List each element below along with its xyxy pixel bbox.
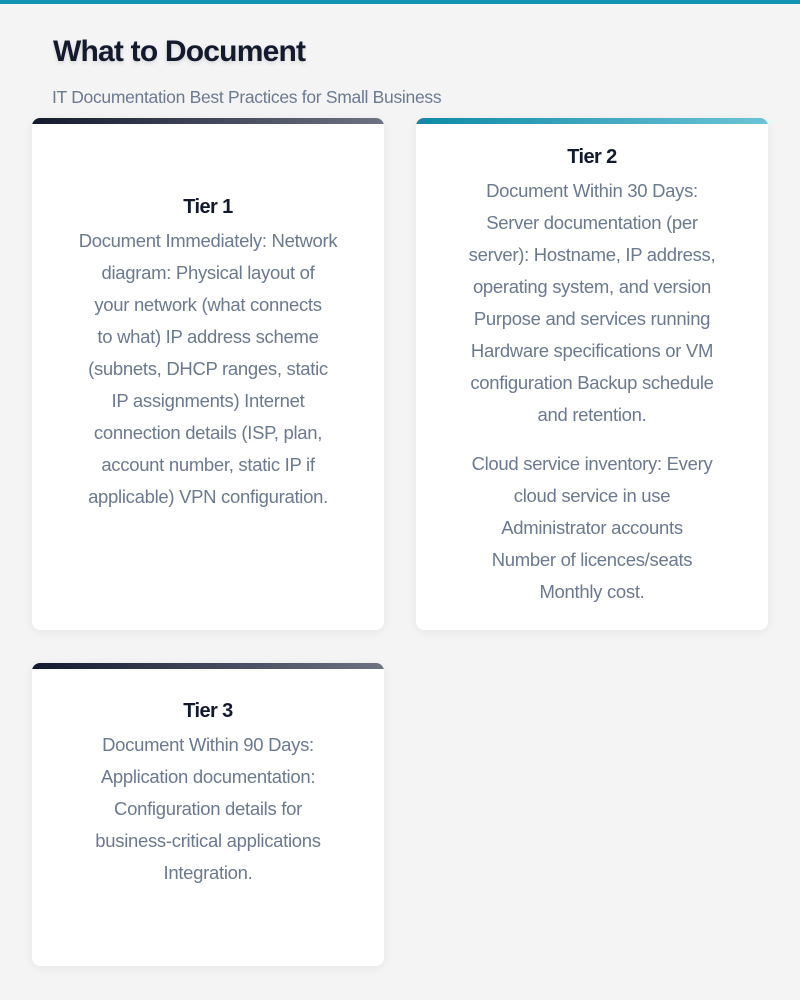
text: tier 2 body: [469, 180, 715, 425]
text: tier 2 cloud: [472, 453, 713, 602]
text: tier 1 body: (subnets, DHCP ranges, static: [88, 358, 328, 378]
text: tier 1 body: applicable) VPN configuration.: [88, 486, 328, 506]
text: tier 2 body: operating system, and version: [473, 276, 711, 297]
text: tier 1 body: your network (what connects: [94, 294, 322, 314]
text: tier 2 body: configuration Backup schedule: [470, 372, 714, 393]
heading: tier 3: Tier 3: [183, 700, 233, 722]
text: tier 1 body: connection details (ISP, plan,: [94, 422, 322, 442]
text: tier 2 cloud: cloud service in use: [514, 485, 670, 506]
subtitle: IT Documentation Best Practices for Small Business: [52, 87, 441, 107]
panel: tier 1: [32, 118, 384, 630]
text: tier 2 cloud: Monthly cost.: [539, 581, 645, 602]
heading: tier 1: Tier 1: [183, 196, 233, 218]
heading: tier 2: Tier 2: [567, 146, 617, 168]
text: tier 1 body: Document Immediately: Network: [79, 230, 337, 250]
text: tier 1 body: [79, 230, 338, 507]
text: tier 2 cloud: Number of licences/seats: [492, 549, 692, 570]
text: tier 1 body: diagram: Physical layout of: [102, 262, 314, 282]
text: tier 2 body: Hardware specifications or VM: [471, 340, 713, 361]
panel: tier 2: [416, 118, 768, 630]
text: tier 3 body: Configuration details for: [114, 798, 302, 819]
text: tier 3 body: Application documentation:: [101, 766, 315, 787]
text: tier 3 body: Integration.: [164, 862, 252, 883]
panel: tier 3: [32, 663, 384, 966]
text: tier 3 body: business-critical applications: [95, 830, 321, 851]
text: tier 2 body: Purpose and services running: [474, 308, 710, 329]
text: tier 2 cloud: Cloud service inventory: Every: [472, 453, 712, 474]
text: tier 2 cloud: Administrator accounts: [501, 517, 683, 538]
title: What to Document: [53, 35, 305, 68]
text: tier 2 body: Document Within 30 Days:: [486, 180, 698, 201]
text: tier 1 body: IP assignments) Internet: [112, 390, 304, 410]
text: tier 2 body: Server documentation (per: [486, 212, 698, 233]
text: tier 3 body: [95, 734, 321, 883]
text: tier 2 body: server): Hostname, IP address,: [469, 244, 715, 265]
text: tier 2 body: and retention.: [538, 404, 646, 425]
text: tier 1 body: to what) IP address scheme: [97, 326, 319, 346]
text: tier 3 body: Document Within 90 Days:: [102, 734, 314, 755]
top accent bar: [0, 0, 800, 4]
text: tier 1 body: account number, static IP if: [101, 454, 315, 474]
